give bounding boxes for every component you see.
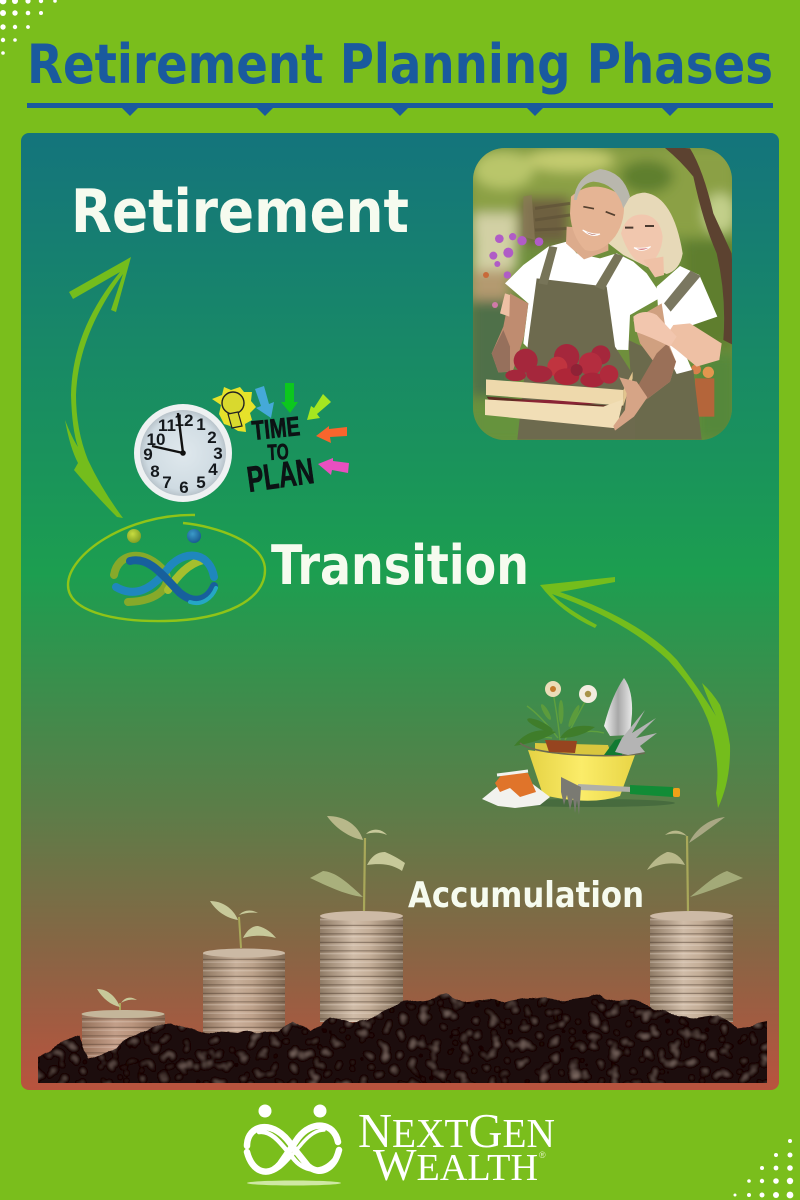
icon: clock: 10	[147, 430, 165, 449]
icon: clock: 7	[162, 473, 172, 492]
coin stack 4 with sprout	[647, 817, 743, 1022]
title underline with markers	[27, 103, 773, 116]
pail	[535, 743, 612, 756]
icon: clock: 8	[150, 462, 160, 481]
heading: Transition: Transition	[271, 534, 529, 597]
image: coin stacks growing from soil	[38, 816, 767, 1083]
man's left arm	[492, 293, 528, 372]
crate	[486, 396, 624, 408]
pot	[545, 740, 577, 753]
logo mark	[247, 1104, 339, 1173]
icon: clock: 9	[143, 445, 153, 464]
icon: clock	[134, 404, 232, 502]
man's neck and head	[566, 227, 608, 259]
rake	[578, 784, 632, 792]
woman's hand	[633, 312, 677, 347]
woman apron	[628, 340, 702, 440]
arrow: transition to retirement	[65, 257, 131, 518]
gloves	[482, 771, 550, 808]
logo: hand-drawn circle with infinity mark	[68, 515, 265, 621]
woman shirt	[657, 266, 717, 374]
photo: retired couple with apples	[470, 147, 737, 443]
icon: time to plan text: TO	[267, 439, 289, 465]
icon: clock: 5	[196, 473, 206, 492]
coin stack 1 with sprout	[82, 989, 165, 1072]
man's apron	[517, 278, 635, 440]
plant	[516, 692, 604, 745]
basket	[695, 378, 714, 417]
icon: clock: 2	[207, 428, 217, 447]
man's right arm	[633, 303, 676, 399]
fence posts	[523, 195, 535, 240]
woman hair and face	[608, 193, 683, 274]
apples behind crate	[505, 344, 618, 387]
icon: clock: 12	[175, 411, 193, 430]
icon: clock: 11	[158, 416, 176, 435]
fork	[615, 710, 657, 755]
panel: phases	[20, 133, 790, 1100]
soil mound	[38, 993, 767, 1083]
icon: time to plan text	[244, 411, 316, 500]
icon: clock: 3	[213, 444, 223, 463]
man's white shirt	[505, 242, 662, 350]
icon: time to plan text: TIME	[250, 411, 301, 446]
flowers	[545, 681, 561, 697]
woman's arm	[663, 323, 722, 367]
heading: Retirement: Retirement	[71, 177, 409, 247]
tree trunk	[665, 148, 732, 344]
purple flowers	[483, 233, 543, 308]
icon: clock: 4	[208, 460, 218, 479]
arrow: accumulation to transition	[540, 577, 730, 808]
icon: gardening tools and pail	[482, 678, 680, 815]
logo: NextGen Wealth: WEALTH	[373, 1139, 538, 1190]
coin stack 3 with sprout	[310, 816, 405, 1022]
man's hand	[613, 377, 647, 431]
logo: NextGen Wealth	[247, 1103, 555, 1190]
coin stack 2 with sprout	[203, 901, 285, 1037]
icon: time to plan text: PLAN	[244, 450, 316, 500]
icon: light bulb	[212, 387, 256, 432]
wordmark: NEXTGEN	[358, 1103, 555, 1158]
logo: NextGen Wealth: ®	[539, 1150, 546, 1160]
icon: clock: 1	[196, 415, 206, 434]
icon: clock: 6	[179, 478, 189, 497]
halftone dots: bottom right	[734, 1139, 793, 1198]
icon: colored arrows	[255, 383, 349, 475]
trowel	[604, 678, 632, 736]
halftone dots: top left	[0, 0, 57, 55]
heading: Accumulation: Accumulation	[408, 875, 644, 916]
